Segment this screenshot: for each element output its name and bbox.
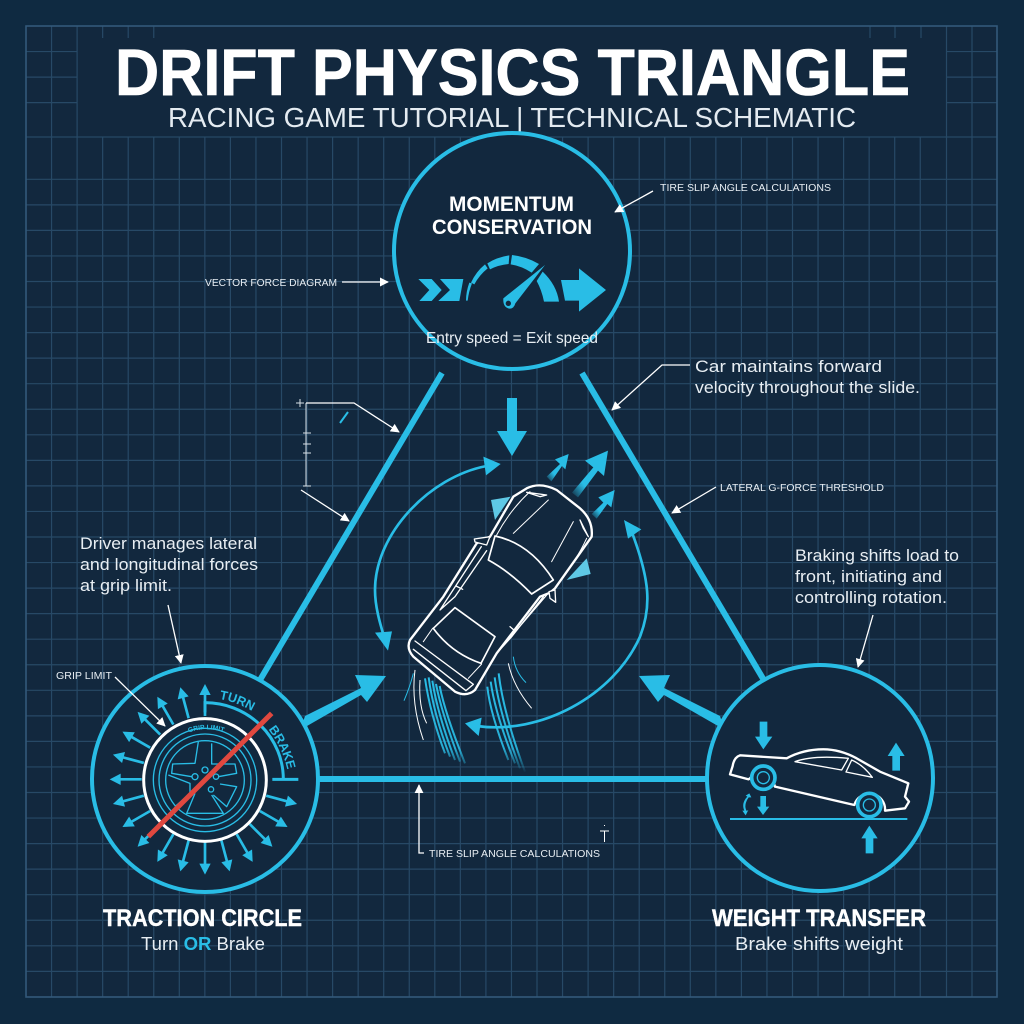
annotation: tire slip top: TIRE SLIP ANGLE CALCULATIONS — [660, 182, 831, 194]
annotation: driver manages forces — [80, 534, 258, 663]
curved labels: BRAKE — [268, 724, 296, 770]
caption: brake shifts weight: Brake shifts weight — [735, 934, 903, 954]
annotation: braking shifts load: Braking shifts load to — [795, 546, 959, 565]
annotation: grip limit: GRIP LIMIT — [56, 670, 113, 682]
annotation: braking shifts load — [795, 546, 959, 667]
rotation arrow: right — [465, 520, 647, 736]
turn and brake bracket — [205, 703, 298, 779]
car body — [409, 485, 592, 694]
ground line — [730, 816, 907, 822]
annotation: forward velocity: velocity throughout the slide. — [695, 378, 920, 397]
annotation: vector force diagram: VECTOR FORCE DIAGRAM — [205, 277, 337, 289]
tire — [144, 719, 266, 841]
red slash — [148, 713, 272, 837]
heading: momentum conservation: MOMENTUM — [449, 193, 574, 216]
annotation: braking shifts load: controlling rotation. — [795, 588, 947, 607]
panel: traction circle — [90, 664, 320, 954]
velocity arrows — [547, 451, 615, 519]
panel: momentum conservation — [394, 133, 630, 369]
heading: momentum conservation: CONSERVATION — [432, 216, 592, 239]
caption: turn or brake: Turn OR Brake — [141, 934, 265, 954]
annotation: braking shifts load: front, initiating and — [795, 567, 942, 586]
curved labels — [220, 690, 296, 770]
car body — [730, 749, 909, 811]
annotation: forward velocity — [612, 357, 920, 410]
annotation: tire slip bottom: TIRE SLIP ANGLE CALCULATIONS — [429, 848, 600, 860]
panel: drifting car — [375, 451, 647, 772]
annotation: tire slip top — [615, 182, 831, 212]
subtitle: RACING GAME TUTORIAL | TECHNICAL SCHEMATIC — [168, 102, 856, 133]
annotation: driver manages forces: and longitudinal forces — [80, 555, 258, 574]
arrow: momentum to centre — [497, 398, 527, 456]
annotation: driver manages forces: at grip limit. — [80, 576, 172, 595]
triangle connectors — [260, 373, 765, 779]
title: DRIFT PHYSICS TRIANGLE — [115, 35, 910, 109]
icon: tire with force arrows — [110, 684, 298, 874]
annotation: measurement bracket — [296, 399, 399, 521]
wheels — [752, 766, 881, 817]
annotation: lateral g-force: LATERAL G-FORCE THRESHOLD — [720, 482, 884, 494]
caption: entry speed: Entry speed = Exit speed — [426, 330, 598, 347]
radial force arrows — [110, 684, 299, 875]
heading: weight transfer: WEIGHT TRANSFER — [712, 905, 926, 932]
annotation: lateral g-force — [672, 482, 884, 513]
small tire label: GRIP LIMIT — [188, 724, 225, 732]
load arrows — [742, 722, 905, 853]
annotation: driver manages forces: Driver manages lateral — [80, 534, 257, 553]
annotation: grip limit — [56, 670, 165, 726]
tire marks — [425, 673, 525, 772]
panel: weight transfer — [707, 665, 933, 954]
curved labels: TURN — [220, 690, 256, 711]
heading: traction circle: TRACTION CIRCLE — [103, 905, 302, 932]
annotation: tire slip bottom — [419, 785, 609, 860]
icon: car side view — [730, 722, 909, 853]
windows — [795, 757, 872, 777]
arrow: weight to centre — [639, 675, 722, 726]
arrow: traction to centre — [303, 675, 386, 726]
icon: speedometer with arrows — [418, 255, 606, 312]
tires — [491, 497, 591, 580]
rotation arrow: left — [375, 457, 501, 651]
heading: momentum conservation — [432, 193, 592, 239]
annotation: forward velocity: Car maintains forward — [695, 357, 882, 376]
